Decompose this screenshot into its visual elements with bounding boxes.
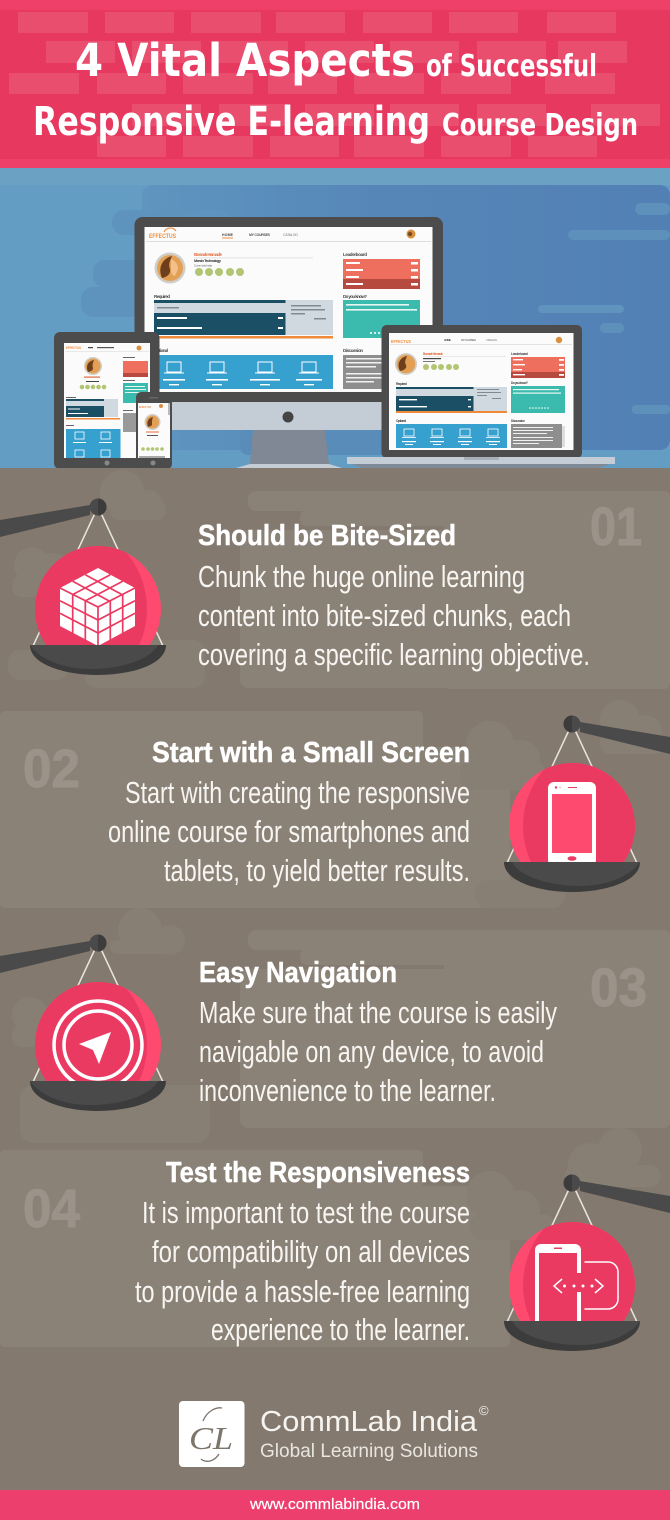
logo tagline: Global Learning Solutions: [260, 1441, 478, 1462]
title line 1: of Successful: [426, 49, 597, 84]
icon: navigation compass: [54, 1001, 142, 1089]
title line 1: 4 Vital Aspects: [75, 34, 415, 87]
monitor screen: CommLab India: [194, 264, 212, 268]
monitor screen: EFFECTUS: [149, 233, 177, 240]
heading 1: Should be Bite-Sized: [198, 520, 456, 552]
body 4: [135, 1195, 470, 1347]
heading 4: Test the Responsiveness: [166, 1157, 470, 1189]
body 2: Start with creating the responsive: [125, 775, 470, 810]
tablet screen: EFFECTUS: [66, 346, 82, 350]
section 3: [0, 934, 646, 1111]
monitor stand: [250, 430, 329, 464]
icon: smartphone: [548, 782, 596, 866]
monitor screen: Leaderboard: [343, 252, 367, 257]
icon: responsive rotation: [535, 1244, 618, 1325]
body 4: experience to the learner.: [211, 1312, 470, 1347]
logo mark: CL: [189, 1420, 233, 1456]
footer bar: [0, 1490, 670, 1520]
monitor screen: Required: [154, 294, 170, 299]
scale 3 with compass icon: [0, 934, 166, 1111]
number 04: 04: [23, 1179, 80, 1239]
icon: cube: [60, 568, 135, 646]
body 3: inconvenience to the learner.: [199, 1073, 496, 1108]
title banner: [0, 0, 670, 168]
laptop screen: Bosnak Hamade: [423, 352, 443, 356]
device: phone: [136, 392, 172, 469]
body 2: [108, 775, 470, 888]
logo name: CommLab India: [260, 1406, 478, 1438]
section 2: [24, 716, 670, 892]
laptop screen: Optional: [396, 419, 406, 423]
body 3: navigable on any device, to avoid: [199, 1034, 544, 1069]
heading 2: Start with a Small Screen: [152, 737, 470, 769]
body 4: It is important to test the course: [142, 1195, 470, 1230]
scale pan: [504, 1321, 640, 1351]
body 3: [199, 995, 557, 1108]
device: desktop monitor: [134, 217, 443, 468]
monitor screen: MY COURSES: [249, 233, 271, 237]
device: laptop: [347, 325, 615, 468]
monitor screen: HOME: [222, 233, 234, 237]
laptop screen: Do you know?: [511, 381, 528, 385]
brown background: [0, 468, 670, 1490]
scale 2 with phone icon: [504, 716, 670, 892]
number 01: 01: [590, 497, 642, 557]
monitor screen: Mersin Technology: [194, 259, 222, 263]
laptop screen: Discussion: [511, 419, 525, 423]
device: tablet: [54, 332, 160, 469]
heading 3: Easy Navigation: [199, 957, 397, 989]
number 02: 02: [23, 739, 80, 799]
body 2: tablets, to yield better results.: [164, 853, 470, 888]
laptop screen: Leaderboard: [511, 352, 528, 356]
body 2: online course for smartphones and: [108, 814, 470, 849]
phone screen: EFFECTUS: [139, 405, 151, 409]
laptop screen: HOME: [444, 338, 451, 342]
monitor screen: Bosnak Hamade: [194, 252, 222, 257]
scale pan: [504, 862, 640, 892]
logo: [179, 1401, 489, 1467]
body 4: to provide a hassle-free learning: [135, 1274, 470, 1309]
monitor screen: [144, 227, 432, 392]
laptop screen: MY COURSES: [461, 338, 476, 342]
section 1: [0, 498, 641, 675]
laptop screen: Required: [396, 382, 407, 386]
body 4: for compatibility on all devices: [152, 1234, 470, 1269]
monitor screen: CATALOG: [283, 233, 298, 237]
scale pan: [30, 1081, 166, 1111]
body 3: Make sure that the course is easily: [199, 995, 557, 1030]
hero background: [0, 168, 670, 468]
scale 1 with cube icon: [0, 498, 166, 675]
laptop screen: CATALOG: [486, 338, 497, 342]
scale pan: [30, 645, 166, 675]
number 03: 03: [590, 958, 647, 1018]
title line 2: Responsive E-learning: [33, 99, 430, 145]
body 1: Chunk the huge online learning: [198, 559, 525, 594]
body 1: [198, 559, 590, 672]
laptop screen: [389, 333, 574, 450]
monitor screen: Do you know?: [343, 294, 367, 299]
monitor camera: [282, 412, 294, 422]
section 4: [24, 1160, 670, 1351]
logo mark: [179, 1401, 244, 1467]
monitor screen: Discussion: [343, 348, 363, 353]
monitor screen: Optional: [154, 348, 168, 353]
scale 4 with responsive devices icon: [504, 1174, 670, 1351]
website url: www.commlabindia.com: [249, 1496, 420, 1513]
copyright mark: ©: [479, 1403, 489, 1418]
laptop screen: EFFECTUS: [391, 339, 411, 344]
